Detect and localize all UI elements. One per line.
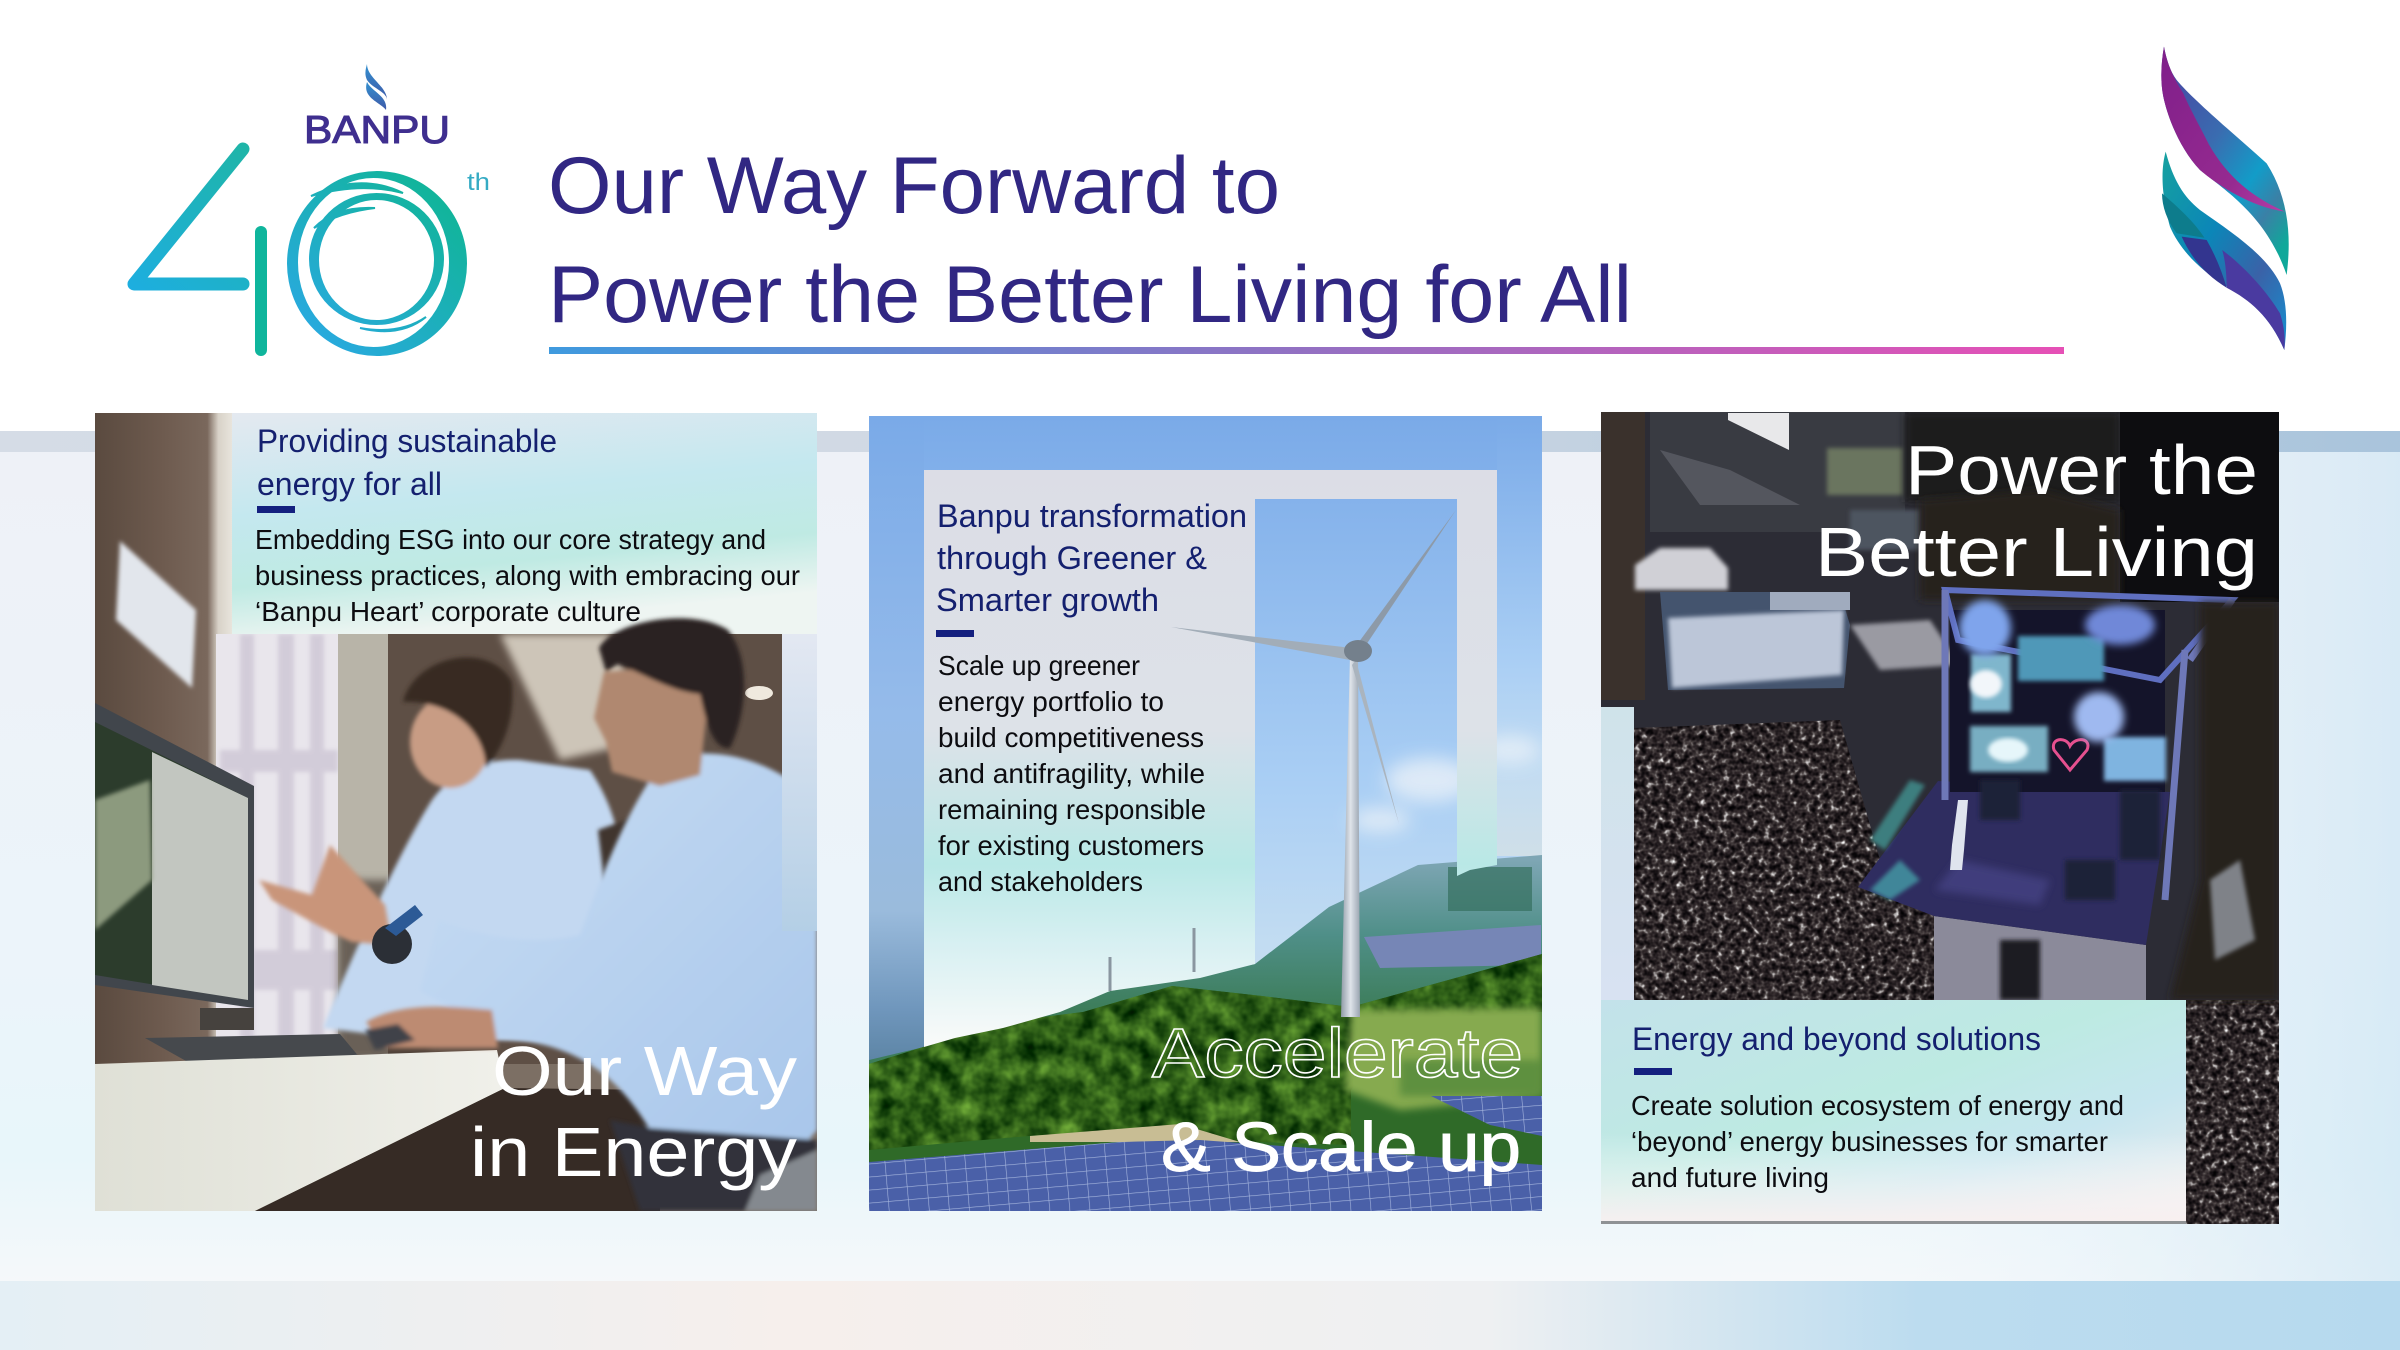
wordmark: BANPU: BANPU: [304, 109, 450, 152]
body text: and stakeholders: [938, 866, 1143, 897]
heading: Energy and beyond solutions: [1632, 1021, 2041, 1057]
accent bar: [1634, 1068, 1672, 1075]
panel title: Power the: [1905, 431, 2258, 509]
panel title: Better Living: [1815, 513, 2258, 591]
body text: Create solution ecosystem of energy and: [1631, 1090, 2124, 1121]
panel: Our Way in Energy: [95, 410, 817, 1211]
panel title: & Scale up: [1161, 1108, 1521, 1186]
body text: and future living: [1631, 1162, 1829, 1193]
panel title: Accelerate: [1152, 1014, 1523, 1092]
desk: [95, 1050, 505, 1211]
left strip: [1601, 707, 1634, 1000]
photo: wind turbine and solar landscape: [869, 416, 1542, 1211]
screens: [1971, 654, 2011, 712]
photo: night concert with stage and crowd: [1601, 412, 2279, 1224]
foreground greenery: [869, 954, 1542, 1165]
buildings: [1650, 412, 1905, 532]
heading: Providing sustainable: [257, 423, 557, 459]
body text: Embedding ESG into our core strategy and: [255, 524, 766, 555]
wind turbine: [1171, 510, 1456, 1017]
body text: energy portfolio to: [938, 686, 1164, 717]
translucent text frame: [924, 470, 1497, 1047]
wristwatch: [372, 924, 412, 964]
numeral 0 rings: [287, 171, 467, 356]
body text: build competitiveness: [938, 722, 1204, 753]
stage lights and band: [1980, 780, 2160, 900]
truss: [1945, 590, 2232, 680]
title: Power the Better Living for All: [548, 250, 1632, 340]
panel title: in Energy: [470, 1113, 797, 1191]
icon: small Banpu flame: [365, 64, 387, 110]
panel title: [1815, 431, 2258, 591]
heading: [936, 498, 1247, 618]
heading: energy for all: [257, 466, 442, 502]
body text: and antifragility, while: [938, 758, 1205, 789]
solar arrays: [869, 1140, 1542, 1211]
panel: Accelerate and Scale up: [869, 416, 1542, 1211]
crowd: [1634, 720, 1950, 1000]
title: [548, 141, 1632, 340]
heading: [257, 423, 557, 502]
performer: [1950, 800, 1968, 870]
heart neon: [2053, 740, 2088, 770]
heading: Smarter growth: [936, 582, 1159, 618]
dark gap between figures: [594, 819, 628, 880]
monitor: [95, 703, 254, 1030]
keyboard: [145, 1034, 358, 1061]
photo: office scene with two engineers: [95, 410, 817, 1211]
accent bar: [257, 506, 295, 513]
panel: Power the Better Living: [1601, 412, 2279, 1224]
body text: [1631, 1090, 2124, 1193]
transmission towers: [1110, 928, 1194, 991]
stage: [1858, 590, 2232, 1000]
text box: [1601, 1000, 2186, 1221]
parked car: [1635, 548, 1728, 590]
body text: [938, 650, 1206, 897]
logo: Banpu 40th anniversary: [134, 64, 490, 356]
body text: remaining responsible: [938, 794, 1206, 825]
icon: large Banpu leaf mark: [2161, 47, 2289, 350]
distant hills: [869, 855, 1542, 1064]
sign on the wall: [116, 541, 196, 688]
panel title: Our Way: [492, 1032, 797, 1110]
accent bar: [936, 630, 974, 637]
text box backdrop: [232, 410, 817, 634]
right side street: [2170, 602, 2279, 1000]
heading: Banpu transformation: [937, 498, 1247, 534]
body text: for existing customers: [938, 830, 1204, 861]
panel title: [1152, 1014, 1523, 1186]
superscript th: th: [467, 169, 490, 196]
title: Our Way Forward to: [548, 141, 1280, 231]
body text: [255, 524, 800, 627]
numeral 4: [134, 149, 261, 350]
heading: through Greener &: [937, 540, 1207, 576]
body text: ‘Banpu Heart’ corporate culture: [255, 596, 641, 627]
title underline: [549, 347, 2064, 354]
right strip: [782, 634, 817, 931]
body text: Scale up greener: [938, 650, 1140, 681]
clouds: [1350, 736, 1540, 832]
panel title: [470, 1032, 797, 1191]
body text: ‘beyond’ energy businesses for smarter: [1631, 1126, 2108, 1157]
white container: [1660, 592, 1850, 690]
woman: [323, 657, 625, 1040]
body text: business practices, along with embracing our: [255, 560, 800, 591]
cloud decorations: [1959, 600, 2011, 656]
man: [259, 618, 817, 1211]
